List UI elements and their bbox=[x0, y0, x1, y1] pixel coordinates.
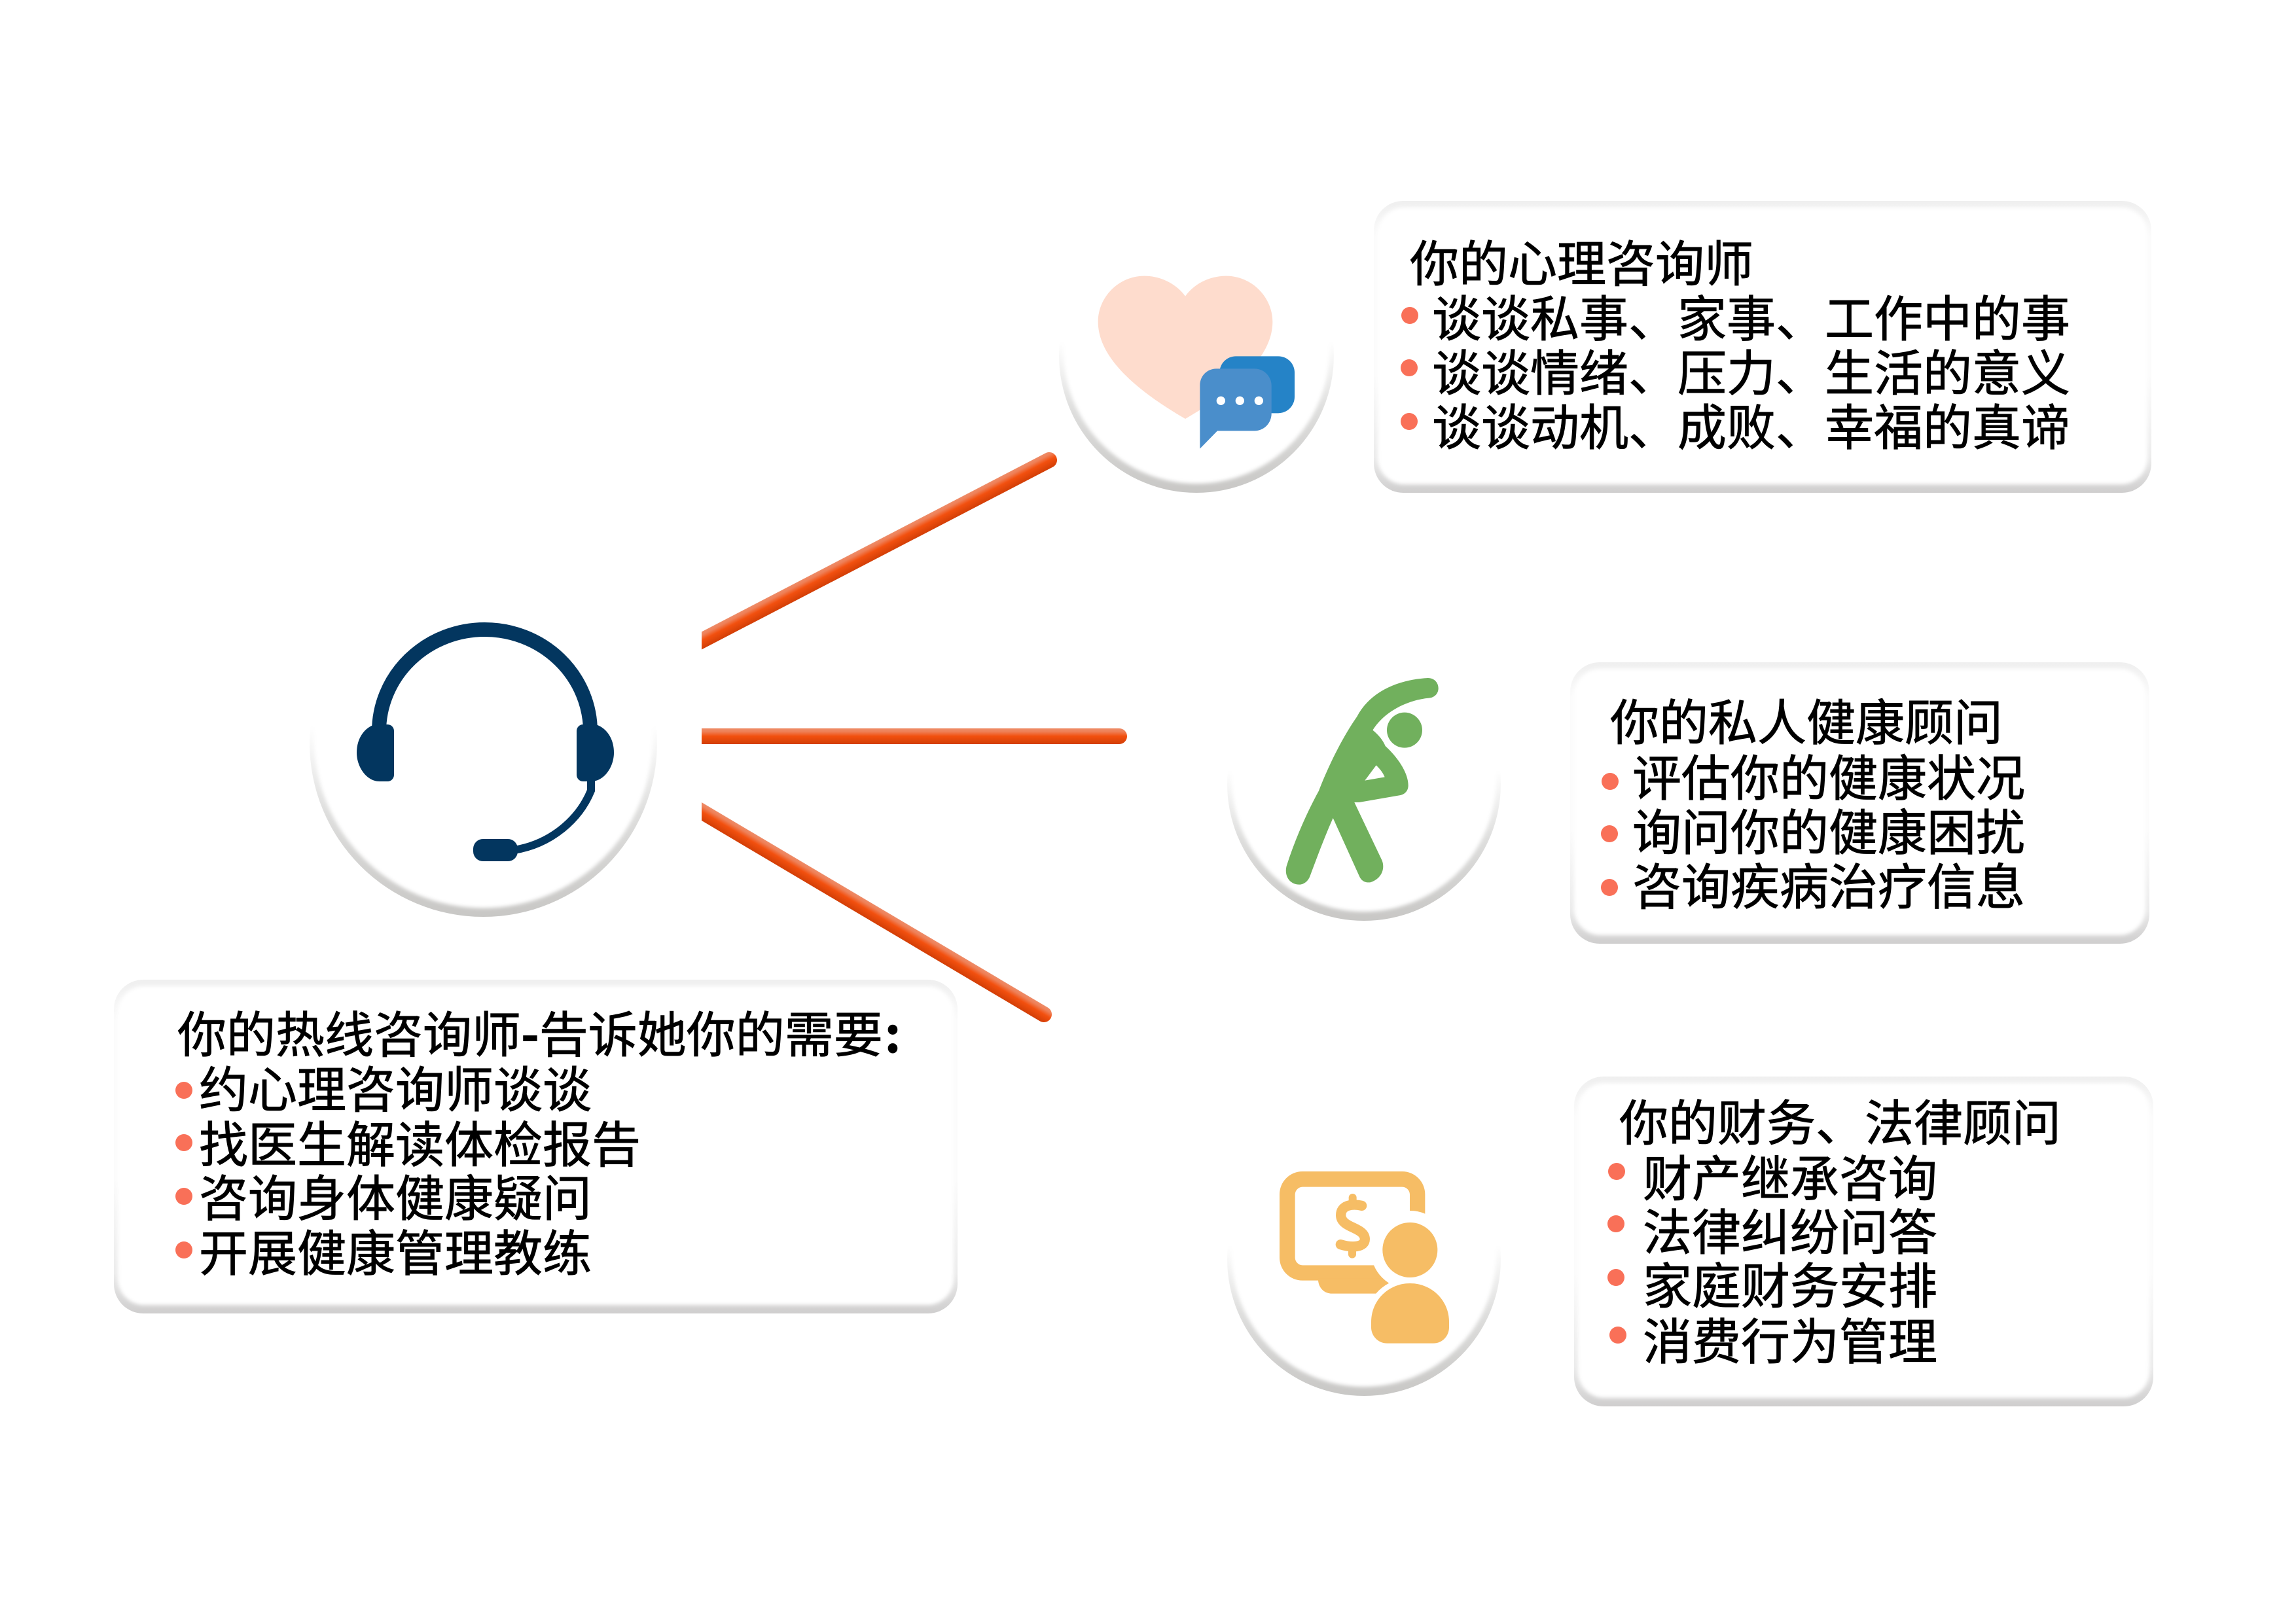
panel: hotline counsellor bbox=[114, 980, 958, 1313]
psychological counsellor circle bbox=[1059, 218, 1334, 493]
list: finance items: 家庭财务安排 bbox=[1643, 1259, 1937, 1314]
line to counsellor bbox=[702, 452, 1057, 649]
icon: stretching figure bbox=[1286, 678, 1439, 885]
list: health items bbox=[1601, 751, 2025, 915]
list: hotline items: 开展健康管理教练 bbox=[199, 1226, 592, 1281]
list: health items: 咨询疾病治疗信息 bbox=[1632, 860, 2025, 915]
list: psychological items: 谈谈私事、家事、工作中的事 bbox=[1432, 292, 2070, 347]
line to finance adviser bbox=[702, 802, 1052, 1022]
list: finance items: 消费行为管理 bbox=[1643, 1315, 1937, 1370]
health adviser circle bbox=[1227, 647, 1501, 921]
list: health items: 评估你的健康状况 bbox=[1632, 751, 2025, 806]
list: psychological items bbox=[1401, 292, 2070, 455]
line to health adviser bbox=[681, 728, 1127, 744]
finance and legal adviser circle bbox=[1227, 1122, 1501, 1396]
list: psychological items: 谈谈动机、成败、幸福的真谛 bbox=[1432, 401, 2070, 455]
list: finance items bbox=[1607, 1152, 1937, 1370]
panel: finance and legal adviser bbox=[1574, 1077, 2153, 1406]
hotline circle with headset bbox=[310, 569, 657, 917]
panel: health adviser bbox=[1570, 662, 2149, 944]
heading: health adviser: 你的私人健康顾问 bbox=[1610, 696, 2003, 751]
panel: psychological counsellor bbox=[1374, 201, 2151, 493]
list: hotline items: 找医生解读体检报告 bbox=[199, 1118, 641, 1173]
list: health items: 询问你的健康困扰 bbox=[1632, 806, 2025, 861]
list: psychological items: 谈谈情绪、压力、生活的意义 bbox=[1432, 346, 2070, 401]
heading: finance and legal adviser: 你的财务、法律顾问 bbox=[1619, 1096, 2061, 1151]
heading: hotline: 你的热线咨询师-告诉她你的需要: bbox=[177, 995, 901, 1067]
icon: monitor with dollar and person bbox=[1280, 1171, 1449, 1344]
list: finance items: 法律纠纷问答 bbox=[1643, 1205, 1937, 1260]
connector lines bbox=[662, 450, 1127, 1025]
icon: heart and chat bubbles bbox=[1098, 276, 1295, 449]
list: hotline items: 咨询身体健康疑问 bbox=[199, 1171, 592, 1226]
list: hotline items: 约心理咨询师谈谈 bbox=[199, 1063, 592, 1118]
heading: psychological counsellor: 你的心理咨询师 bbox=[1410, 237, 1753, 292]
list: finance items: 财产继承咨询 bbox=[1643, 1152, 1937, 1207]
icon: headset bbox=[357, 630, 614, 861]
list: hotline items bbox=[175, 1063, 641, 1281]
